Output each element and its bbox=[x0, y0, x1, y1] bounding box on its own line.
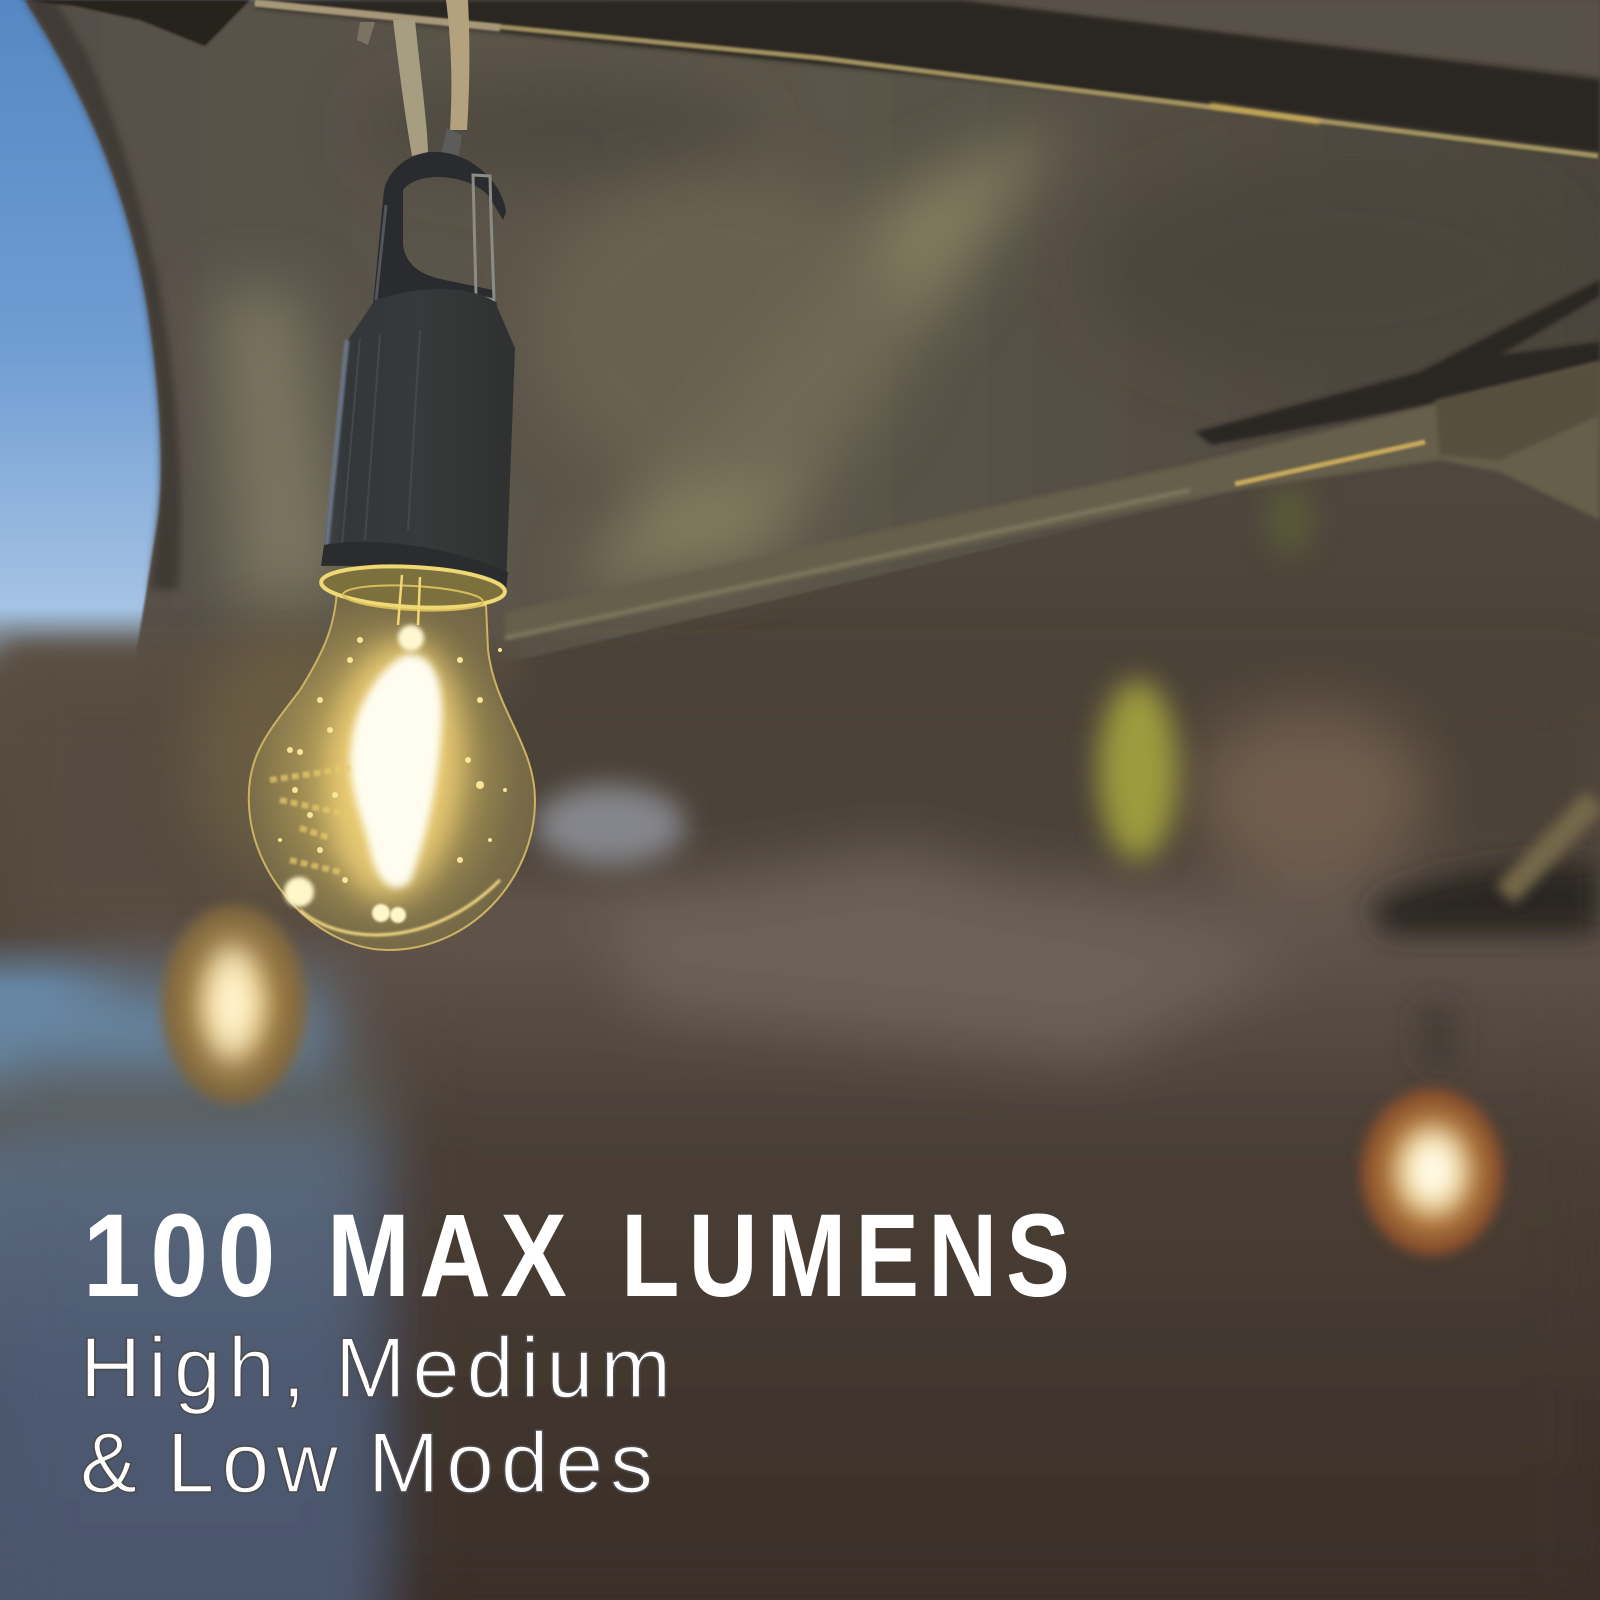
lantern socket with carabiner hook bbox=[321, 152, 515, 590]
top dark beam with gold edge bbox=[20, 0, 1600, 156]
icon: blurred distant bulb right bbox=[1360, 1088, 1504, 1256]
bulb rim bbox=[320, 562, 506, 612]
cable ties bbox=[357, 0, 469, 178]
lower background: wall, ground and blue areas bbox=[0, 680, 1600, 1600]
bulb glass bbox=[249, 590, 535, 950]
tent pole with joint bbox=[505, 280, 1600, 895]
headline text block bbox=[80, 1190, 1079, 1511]
title: 100 bbox=[83, 1190, 285, 1322]
icon: blurred distant bulb left bbox=[161, 904, 307, 1104]
dust specks bbox=[278, 637, 507, 883]
canopy fabric bbox=[25, 0, 1600, 660]
subtitle line two: & Low Modes bbox=[80, 1416, 660, 1511]
main glowing bulb bbox=[249, 562, 535, 950]
subtitle line one: High, Medium bbox=[80, 1321, 678, 1416]
filament supports bbox=[398, 575, 420, 625]
title: LUMENS bbox=[621, 1190, 1079, 1322]
title: MAX bbox=[327, 1190, 576, 1322]
filament glow bbox=[318, 635, 472, 905]
soft canopy bottom edge bbox=[0, 640, 520, 730]
